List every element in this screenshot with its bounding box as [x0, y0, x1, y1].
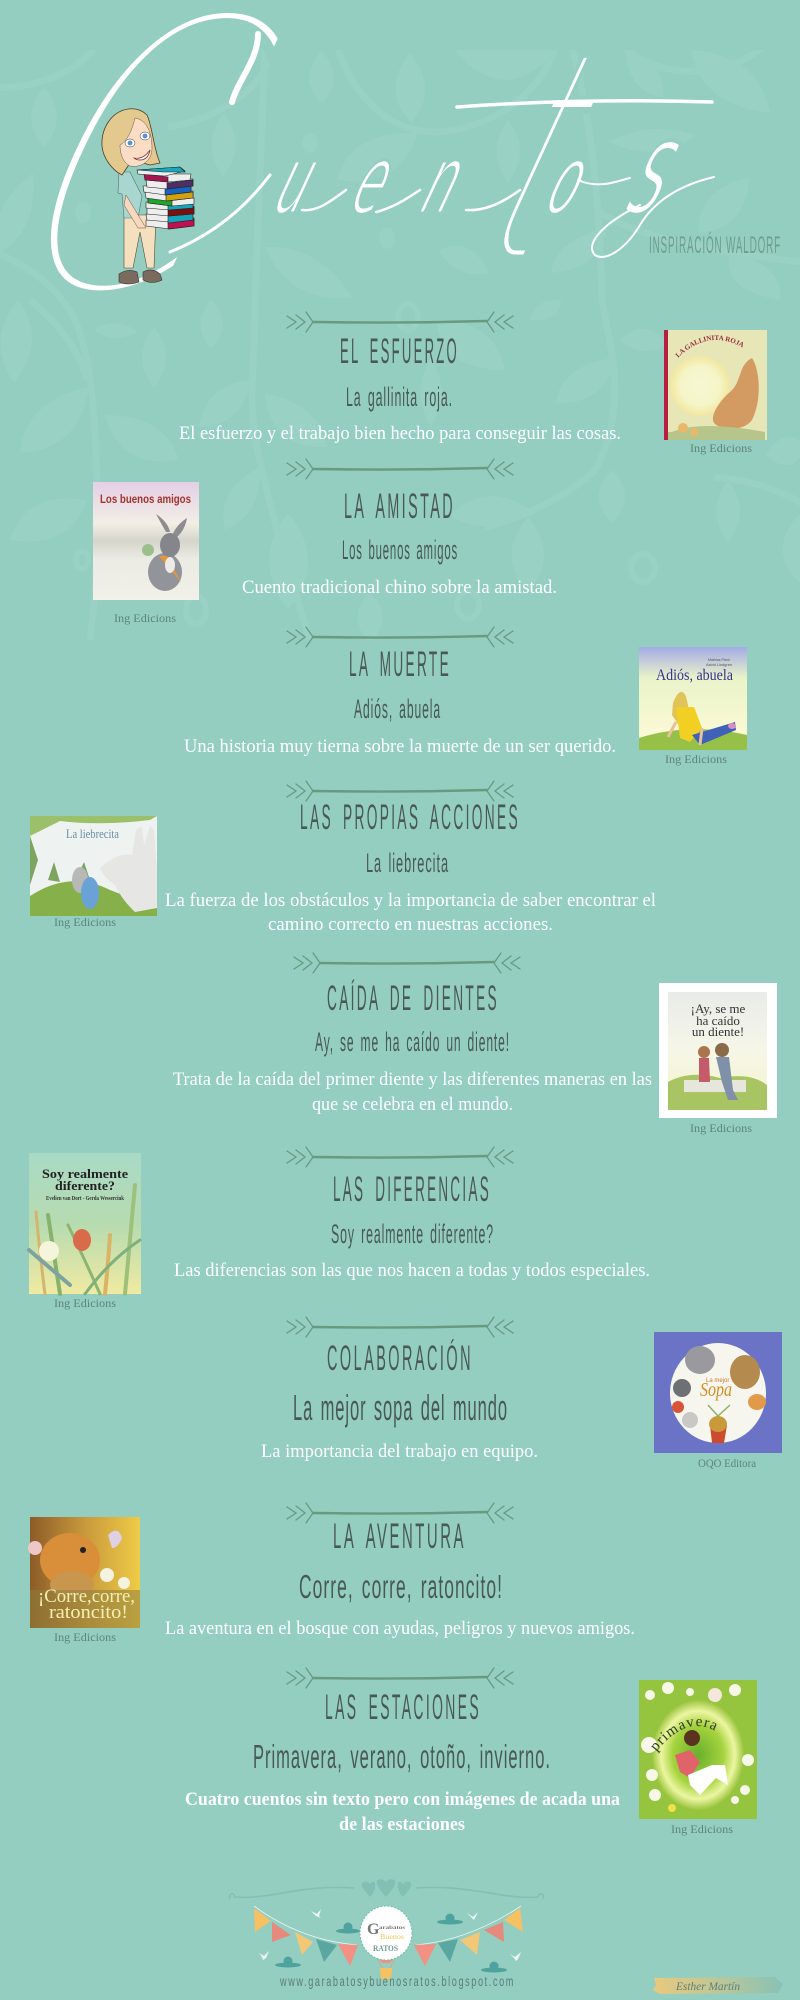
book title: Corre, corre, ratoncito! [299, 1568, 503, 1605]
book cover: ¡Ay, se me ha caído un diente!: ha caído [696, 1013, 740, 1028]
book cover: La liebrecita: La liebrecita [66, 826, 119, 841]
section: El esfuerzo: EL ESFUERZO [340, 332, 459, 371]
title flourishes [170, 34, 714, 257]
ornament with hearts [230, 1879, 543, 1899]
book cover: La mejor sopa del mundo: La mejor [706, 1378, 729, 1384]
caption: Ing Edicions [114, 611, 176, 625]
description: El esfuerzo y el trabajo bien hecho para conseguir las cosas. [179, 423, 621, 444]
section: Las propias acciones [165, 798, 656, 935]
section: Las diferencias: LAS DIFERENCIAS [333, 1170, 491, 1209]
description: Cuatro cuentos sin texto pero con imágenes de acada una [185, 1789, 620, 1810]
section: Las estaciones: LAS ESTACIONES [325, 1688, 481, 1727]
balloon: arabatos [379, 1926, 405, 1931]
description: Trata de la caída del primer diente y las diferentes maneras en las [173, 1069, 652, 1090]
section: La muerte: LA MUERTE [349, 645, 451, 684]
book cover: Adiós, abuela [639, 647, 747, 766]
title lowercase letters: n [404, 126, 485, 236]
caption: Ing Edicions [690, 1121, 752, 1135]
caption: OQO Editora [698, 1456, 757, 1470]
book cover: La liebrecita [30, 816, 157, 929]
section: Las estaciones [185, 1688, 620, 1835]
section: La muerte: Adiós, abuela [354, 694, 441, 724]
footer logo [230, 1879, 543, 1989]
section: Las diferencias: Soy realmente diferente? [331, 1219, 494, 1249]
section: Caída de dientes: que se celebra en el mundo. [312, 1094, 513, 1115]
book cover: ¡Corre, corre, ratoncito!: ratoncito! [49, 1602, 128, 1623]
balloon: G [367, 1921, 380, 1938]
section: Caída de dientes: CAÍDA DE DIENTES [327, 979, 499, 1018]
description: Las diferencias son las que nos hacen a todas y todos especiales. [174, 1260, 650, 1281]
caption: Ing Edicions [54, 1630, 116, 1644]
book cover: Soy realmente diferente?: Evelien van Dort - Gerda Wessercink [46, 1196, 125, 1202]
website address: www.garabatosybuenosratos.blogspot.com [279, 1973, 515, 1989]
title lowercase letters: t [442, 0, 653, 327]
description: La aventura en el bosque con ayudas, peligros y nuevos amigos. [165, 1618, 635, 1639]
section: La aventura [165, 1517, 635, 1639]
section: Las propias acciones: La liebrecita [366, 848, 449, 878]
section: Las diferencias [174, 1170, 650, 1281]
description: La importancia del trabajo en equipo. [261, 1441, 538, 1462]
book cover: La mejor sopa del mundo: Sopa [700, 1379, 732, 1401]
illustration: woman holding a stack of books [102, 109, 194, 284]
balloon: Buenos [380, 1933, 404, 1941]
book cover: Soy realmente diferente? [29, 1153, 141, 1310]
signature: Esther Martín [675, 1979, 740, 1993]
book cover: Los buenos amigos: Los buenos amigos [100, 492, 191, 506]
caption: Ing Edicions [690, 441, 752, 455]
section: Colaboración: COLABORACIÓN [327, 1339, 473, 1378]
caption: Ing Edicions [665, 752, 727, 766]
section: El esfuerzo [179, 332, 621, 444]
book cover: Adiós, abuela: Mathias Fleck [708, 657, 730, 662]
description: La fuerza de los obstáculos y la importancia de saber encontrar el [165, 890, 656, 911]
section: Las propias acciones: camino correcto en nuestras acciones. [268, 914, 553, 935]
section: Colaboración: La mejor sopa del mundo [293, 1387, 508, 1428]
title lowercase letters: e [334, 126, 414, 236]
balloon [360, 1906, 412, 1979]
book cover: ¡Corre, corre, ratoncito! [28, 1517, 140, 1644]
section: Las estaciones: de las estaciones [339, 1814, 465, 1835]
title: Cuentos [0, 0, 756, 381]
book cover: La mejor sopa del mundo [654, 1332, 782, 1470]
book cover: Soy realmente diferente?: diferente? [55, 1178, 115, 1193]
book cover: ¡Corre, corre, ratoncito!: ¡Corre,corre, [38, 1586, 135, 1607]
book cover: Primavera: primavera [651, 1719, 716, 1754]
section: Caída de dientes [173, 979, 652, 1115]
caption: Ing Edicions [54, 915, 116, 929]
stacked books [137, 167, 194, 229]
section: La amistad: LA AMISTAD [344, 487, 455, 526]
book cover: La gallinita roja [664, 330, 767, 455]
book cover: ¡Ay, se me ha caído un diente!: un diente! [692, 1024, 744, 1039]
section: La aventura: LA AVENTURA [333, 1517, 466, 1556]
book cover: Soy realmente diferente?: Soy realmente [42, 1166, 128, 1181]
book cover: Primavera [639, 1680, 757, 1836]
section: Caída de dientes: Ay, se me ha caído un diente! [315, 1027, 510, 1057]
title lowercase letters: u [257, 126, 338, 236]
book cover: La gallinita roja: LA GALLINITA ROJA [675, 335, 743, 358]
caption: Ing Edicions [54, 1296, 116, 1310]
section: Colaboración [261, 1339, 538, 1462]
description: Cuento tradicional chino sobre la amistad. [242, 577, 557, 598]
signature [653, 1977, 783, 1994]
book cover: Adiós, abuela: Adiós, abuela [656, 667, 733, 684]
book cover: Los buenos amigos [93, 482, 199, 625]
caption: Ing Edicions [671, 1822, 733, 1836]
title lowercase letters: s [605, 94, 709, 245]
birds [259, 1909, 521, 1961]
section: La amistad [242, 487, 557, 598]
book cover: Adiós, abuela: Astrid Lindgren [706, 662, 732, 667]
title lowercase letters: o [529, 126, 609, 236]
section: El esfuerzo: La gallinita roja. [346, 382, 453, 412]
clouds [275, 1914, 507, 1972]
bunting flags [254, 1908, 523, 1966]
section: La amistad: Los buenos amigos [342, 535, 458, 565]
book cover: ¡Ay, se me ha caído un diente! [659, 983, 777, 1135]
book cover: ¡Ay, se me ha caído un diente!: ¡Ay, se me [691, 1001, 746, 1016]
section: La muerte [184, 645, 616, 757]
description: Una historia muy tierna sobre la muerte de un ser querido. [184, 736, 616, 757]
balloon: RATOS [373, 1944, 399, 1953]
